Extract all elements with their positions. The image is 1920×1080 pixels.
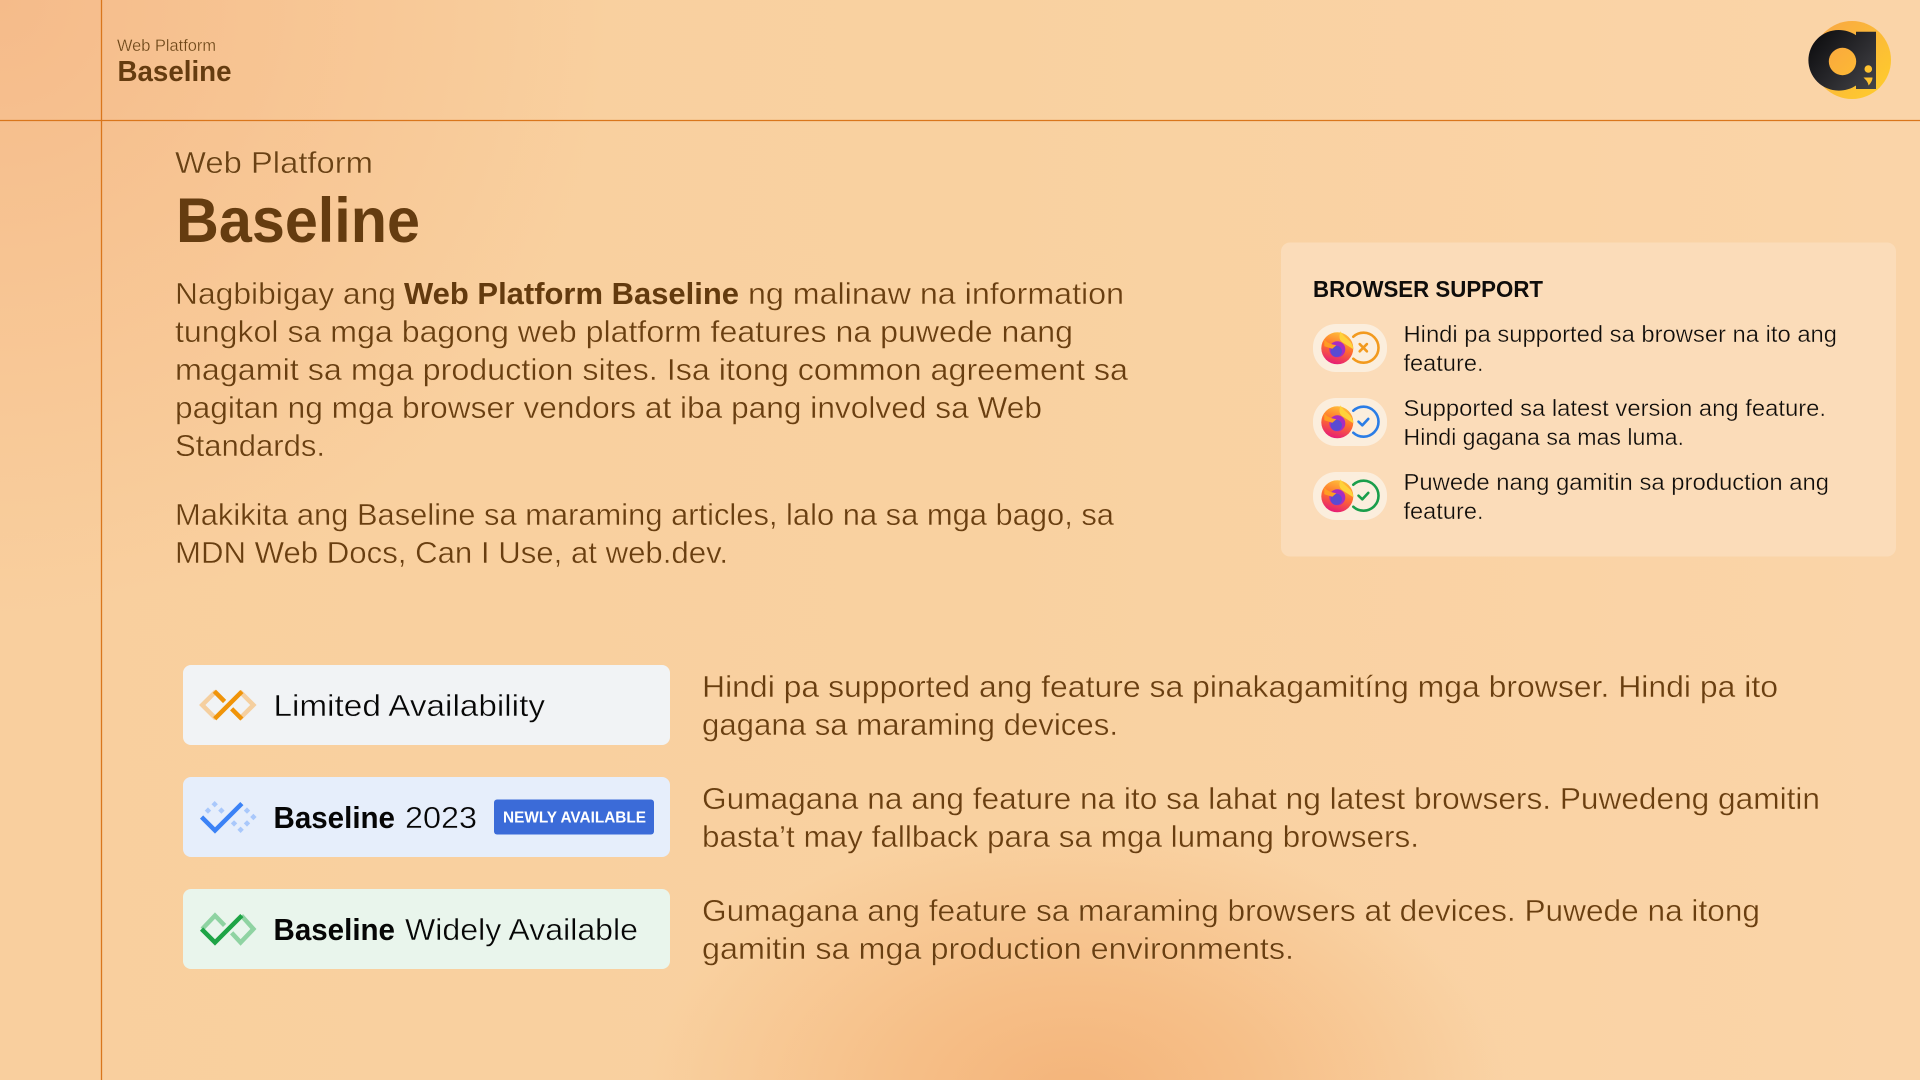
second paragraph	[175, 497, 1115, 570]
intro paragraph: pagitan ng mga browser vendors at iba pang involved sa Web	[175, 390, 1042, 425]
description: widely available	[702, 893, 1760, 966]
intro paragraph: Web Platform Baseline	[404, 276, 739, 311]
panel heading: BROWSER SUPPORT	[1313, 276, 1544, 302]
tag: newly available: NEWLY AVAILABLE	[503, 810, 646, 826]
logo	[1808, 21, 1891, 99]
panel: browser support	[1281, 242, 1896, 556]
intro paragraph: magamit sa mga production sites. Isa itong common agreement sa	[175, 352, 1129, 387]
intro paragraph: tungkol sa mga bagong web platform features na puwede nang	[175, 314, 1073, 349]
heading: eyebrow: Web Platform	[175, 145, 373, 180]
description: widely available: gamitin sa mga production environments.	[702, 931, 1294, 966]
header: deck title	[117, 37, 232, 88]
icon: newly available	[202, 801, 257, 833]
row: not supported: Hindi pa supported sa browser na ito ang	[1404, 321, 1837, 347]
badge: baseline widely available: Baseline	[274, 913, 395, 947]
description: baseline 2023: Gumagana na ang feature na ito sa lahat ng latest browsers. Puwedeng gamitin	[702, 781, 1820, 816]
header: deck title: Baseline	[118, 56, 232, 88]
header: deck title: Web Platform	[117, 37, 216, 55]
description: limited availability: gagana sa maraming devices.	[702, 707, 1118, 742]
description: widely available: Gumagana ang feature sa maraming browsers at devices. Puwede na itong	[702, 893, 1760, 928]
row: latest version only: Hindi gagana sa mas luma.	[1404, 424, 1684, 450]
second paragraph: MDN Web Docs, Can I Use, at web.dev.	[175, 535, 728, 570]
heading: title: Baseline	[176, 186, 420, 256]
tag: newly available	[494, 800, 654, 834]
row: latest version only: Supported sa latest version ang feature.	[1404, 395, 1826, 421]
row: production ready: Puwede nang gamitin sa production ang	[1404, 469, 1829, 495]
badge: baseline widely available	[183, 889, 670, 969]
badge: limited availability: Limited Availability	[274, 689, 546, 723]
description: limited availability: Hindi pa supported ang feature sa pinakagamitíng mga browser. Hindi pa ito	[702, 669, 1778, 704]
badge: baseline 2023 newly available: Baseline	[274, 801, 395, 835]
intro paragraph: Nagbibigay ang	[175, 276, 396, 311]
icon: widely available	[202, 916, 253, 942]
row: not supported: feature.	[1404, 350, 1484, 376]
icon: limited availability	[202, 691, 253, 719]
intro paragraph: Standards.	[175, 428, 325, 463]
second paragraph: Makikita ang Baseline sa maraming articles, lalo na sa mga bago, sa	[175, 497, 1115, 532]
row: production ready	[1313, 469, 1829, 524]
intro paragraph: ng malinaw na information	[748, 276, 1124, 311]
row: latest version only	[1313, 395, 1826, 450]
badge: baseline widely available: Widely Available	[405, 913, 638, 947]
intro paragraph	[175, 276, 1129, 463]
description: limited availability	[702, 669, 1778, 742]
badge: baseline 2023 newly available: 2023	[405, 801, 477, 835]
row: not supported	[1313, 321, 1837, 376]
row: production ready: feature.	[1404, 498, 1484, 524]
description: baseline 2023	[702, 781, 1820, 854]
description: baseline 2023: basta’t may fallback para sa mga lumang browsers.	[702, 819, 1419, 854]
badge: baseline 2023 newly available	[183, 777, 670, 857]
badge: limited availability	[183, 665, 670, 745]
